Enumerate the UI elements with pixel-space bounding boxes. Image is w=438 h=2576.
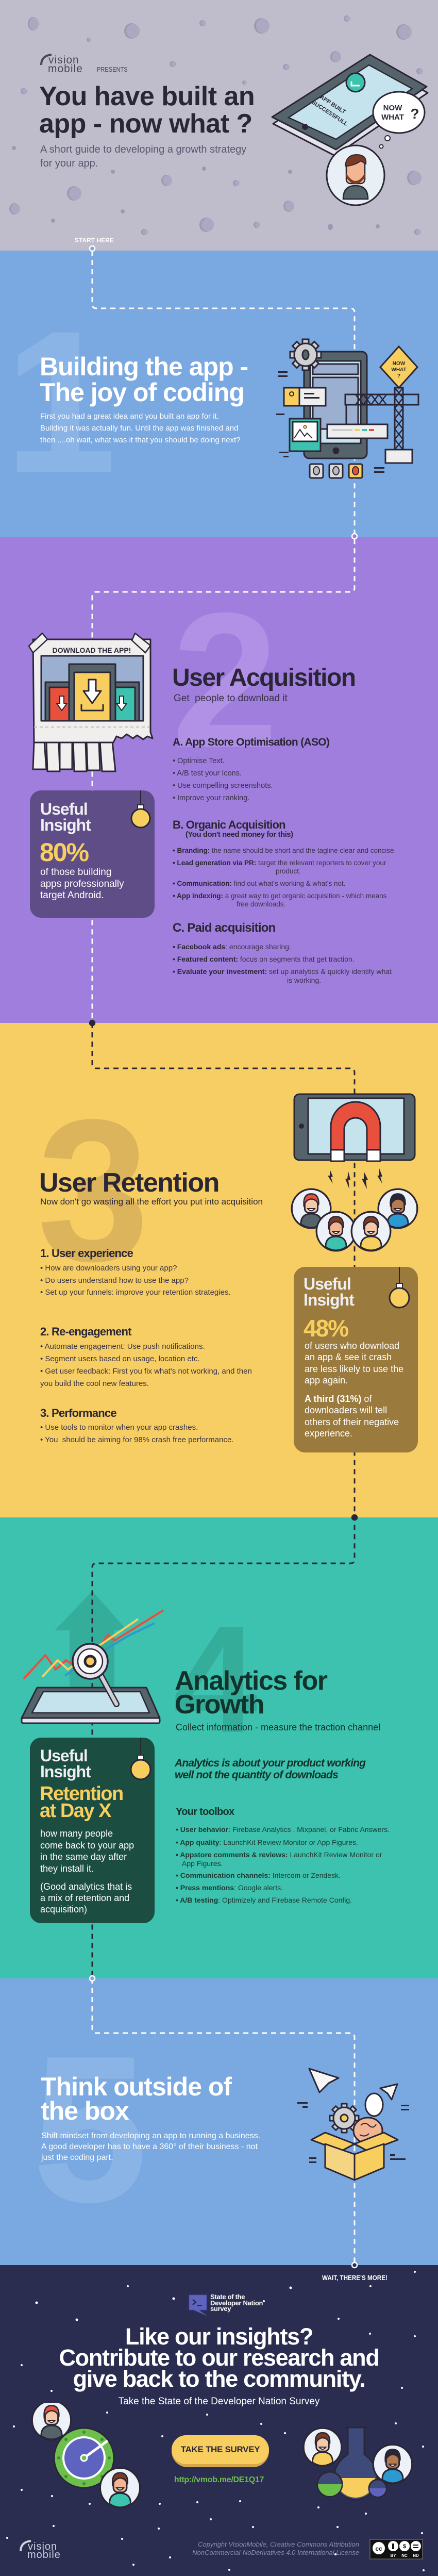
logo: state of the developer nation survey: Developer Nation	[210, 2299, 263, 2307]
icon: creative commons badge: ND	[413, 2553, 419, 2558]
ghost number 2: 2	[172, 573, 278, 788]
illustration: app construction	[276, 338, 419, 478]
callout: useful insight 48%: downloaders will tell	[305, 1405, 387, 1415]
subsection: performance: • You should be aiming for 98% crash free performance.	[40, 1435, 233, 1444]
subsection: paid acquisition: is working.	[287, 976, 321, 984]
subsection: paid acquisition: • Evaluate your investment: set up analytics & quickly identify what	[173, 967, 392, 976]
callout: retention at day x: in the same day after	[40, 1852, 127, 1862]
section 2: user acquisition	[0, 537, 438, 1023]
callout: retention at day x: come back to your app	[40, 1840, 134, 1850]
callout: retention at day x: Useful	[40, 1746, 88, 1765]
heading: think outside the box	[41, 2072, 232, 2125]
logo: state of the developer nation survey	[189, 2293, 263, 2316]
button: take the survey: TAKE THE SURVEY	[181, 2445, 260, 2454]
illustration: dial with avatars	[31, 2403, 141, 2509]
heading: analytics for growth: Analytics for	[175, 1666, 327, 1696]
callout: useful insight 80%: Insight	[40, 816, 91, 834]
list: your toolbox: • Press mentions: Google alerts.	[176, 1884, 283, 1892]
text: copyright	[192, 2540, 359, 2556]
subsection: organic acquisition: B. Organic Acquisition	[173, 818, 285, 831]
illustration: magnet pulling users	[291, 1093, 418, 1252]
callout: useful insight 80%	[30, 790, 155, 918]
icon: light bulb	[389, 1267, 410, 1309]
subsection: user experience	[40, 1247, 231, 1297]
title: You have built an	[39, 81, 255, 111]
callout: retention at day x: Insight	[40, 1762, 91, 1781]
callout: retention at day x: a mix of retention and	[40, 1893, 129, 1903]
ghost number 4: 4	[173, 1594, 258, 1764]
subsection: user experience: • Do users understand how to use the app?	[40, 1276, 189, 1285]
footer logo: vision mobile	[20, 2540, 61, 2561]
subsection: organic acquisition: • Branding: the name should be short and the tagline clear and concise.	[173, 847, 396, 854]
icon: creative commons badge: NC	[401, 2553, 408, 2558]
callout: retention at day x: (Good analytics that is	[40, 1881, 132, 1892]
subsection: user experience: 1. User experience	[40, 1247, 133, 1260]
text: building intro: Building it was actually fun. Until the app was finished and	[40, 424, 238, 433]
subsection: organic acquisition: • App indexing: a great way to get organic acquisition - which means	[173, 892, 386, 900]
subtitle: collect information: Collect information - measure the traction channel	[176, 1722, 380, 1732]
icon: light bulb	[131, 790, 150, 828]
list: your toolbox: • User behavior: Firebase Analytics , Mixpanel, or Fabric Answers.	[176, 1825, 390, 1834]
heading: user retention: User Retention	[39, 1168, 219, 1198]
subsection: re-engagement: • Automate engagement: Use push notifications.	[40, 1342, 205, 1351]
subsection: ASO: A. App Store Optimisation (ASO)	[173, 736, 329, 748]
subsection: ASO: • Optimise Text.	[173, 757, 225, 765]
illustration: download poster: DOWNLOAD THE APP!	[53, 646, 131, 654]
illustration: ideas box	[297, 2068, 409, 2181]
text: shift mindset: Shift mindset from developing an app to running a business.	[41, 2132, 260, 2140]
section: footer call to action	[0, 2265, 438, 2576]
subsection: organic acquisition	[173, 818, 396, 908]
illustration: flasks with avatars	[303, 2426, 413, 2501]
section: hero	[0, 0, 438, 251]
illustration: phone with now what bubble: APP BUILT	[318, 94, 347, 115]
logo: vision mobile presents: vision	[48, 54, 79, 66]
text: shift mindset: just the coding part.	[41, 2153, 113, 2162]
text: copyright: NonCommercial-NoDerivatives 4.0 International License	[192, 2549, 359, 2556]
heading: analytics for growth	[175, 1666, 328, 1720]
subsection: ASO	[173, 736, 329, 802]
callout: retention at day x: they install it.	[40, 1863, 94, 1874]
illustration: app construction: WHAT	[391, 367, 407, 373]
callout: useful insight 48%: an app & see it crash	[305, 1352, 392, 1362]
callout: retention at day x: acquisition)	[40, 1904, 87, 1914]
text: shift mindset: A good developer has to have a 360° of their business - not	[41, 2142, 258, 2151]
list: your toolbox: • Appstore comments & reviews: LaunchKit Review Monitor or	[176, 1851, 382, 1859]
quote: analytics is about product	[174, 1757, 366, 1781]
heading: like our insights: Like our insights?	[125, 2323, 313, 2350]
list: your toolbox	[176, 1806, 390, 1904]
callout: useful insight 48%: experience.	[305, 1428, 352, 1439]
subtitle: for your app.	[40, 158, 98, 169]
icon: creative commons badge: cc	[375, 2545, 382, 2552]
logo: state of the developer nation survey: survey	[210, 2305, 231, 2313]
callout: useful insight 48%: Useful	[304, 1275, 351, 1293]
subsection: paid acquisition: C. Paid acquisition	[173, 921, 275, 935]
subtitle	[40, 144, 246, 169]
icon: creative commons badge	[370, 2539, 423, 2560]
callout: useful insight 48%: Insight	[304, 1291, 354, 1309]
icon: light bulb	[130, 1738, 151, 1780]
callout: useful insight 80%: apps professionally	[40, 879, 124, 889]
text: shift mindset	[41, 2132, 260, 2162]
stars background	[6, 2271, 425, 2571]
ghost arrow	[55, 1592, 127, 1687]
ghost number 5: 5	[32, 2012, 148, 2245]
label: wait there's more: WAIT, THERE'S MORE!	[322, 2274, 388, 2282]
heading: building the app: Building the app -	[40, 352, 248, 381]
subsection: re-engagement	[40, 1325, 252, 1388]
label: start here: START HERE	[75, 237, 114, 244]
subtitle: A short guide to developing a growth strategy	[40, 144, 246, 155]
callout: useful insight 48%: are less likely to use the	[305, 1364, 403, 1374]
subsection: organic acquisition: (You don't need money for this)	[186, 830, 293, 839]
list: your toolbox: • App quality: LaunchKit Review Monitor or App Figures.	[176, 1838, 358, 1846]
logo: state of the developer nation survey: State of the	[210, 2293, 245, 2301]
section 5: think outside the box	[0, 1978, 438, 2265]
footer logo: vision mobile: vision	[28, 2541, 57, 2552]
ghost number 3: 3	[37, 1078, 149, 1303]
illustration: phone with now what bubble: ?	[410, 106, 419, 122]
subsection: paid acquisition	[173, 921, 392, 984]
heading: building the app: The joy of coding	[40, 378, 244, 407]
subsection: organic acquisition: free downloads.	[237, 900, 285, 908]
callout: useful insight 48%: others of their negative	[305, 1417, 399, 1427]
subsection: paid acquisition: • Facebook ads: encourage sharing.	[173, 943, 291, 951]
heading: building the app	[40, 352, 248, 407]
heading: like our insights: Contribute to our research and	[59, 2344, 379, 2371]
callout: useful insight 80%: of those building	[40, 867, 111, 878]
icon: creative commons badge: BY	[390, 2553, 396, 2558]
callout: retention at day x	[30, 1738, 155, 1923]
illustration: phone with now what bubble: SUCCESSFULL	[310, 99, 349, 127]
illustration: download poster	[28, 632, 154, 772]
subsection: user experience: • How are downloaders using your app?	[40, 1264, 177, 1273]
heading: think outside the box: Think outside of	[41, 2072, 231, 2101]
subsection: re-engagement: • Get user feedback: First you fix what's not working, and then	[40, 1367, 252, 1376]
subsection: ASO: • A/B test your Icons.	[173, 769, 242, 778]
heading: user acquisition: User Acquisition	[172, 664, 356, 691]
callout: useful insight 48%: A third (31%) of	[305, 1394, 372, 1404]
link: survey url: http://vmob.me/DE1Q17	[174, 2475, 264, 2484]
subtitle: take the survey: Take the State of the Developer Nation Survey	[119, 2396, 319, 2407]
callout: useful insight 48%: app again.	[305, 1375, 348, 1385]
callout: useful insight 48%	[294, 1267, 418, 1452]
title	[39, 81, 255, 139]
section 1: building the app	[0, 251, 438, 537]
footer logo: vision mobile: mobile	[27, 2549, 61, 2561]
logo: vision mobile presents	[40, 54, 128, 75]
ghost number 1: 1	[4, 289, 117, 515]
callout: retention at day x: how many people	[40, 1828, 113, 1839]
callout: useful insight 48%: 48%	[304, 1315, 348, 1342]
subsection: re-engagement: you build the cool new features.	[40, 1379, 149, 1388]
illustration: app construction: ?	[397, 373, 400, 379]
subsection: organic acquisition: product.	[276, 867, 301, 875]
subsection: re-engagement: 2. Re-engagement	[40, 1325, 131, 1338]
text: building intro: then ....oh wait, what was it that you should be doing next?	[40, 436, 241, 444]
subsection: performance	[40, 1407, 233, 1444]
icon: creative commons badge: $	[403, 2544, 406, 2550]
heading: analytics for growth: Growth	[175, 1690, 264, 1720]
list: your toolbox: App Figures.	[182, 1859, 223, 1868]
text: copyright: Copyright VisionMobile, Creative Commons Attribution	[198, 2540, 359, 2548]
list: your toolbox: Your toolbox	[176, 1806, 234, 1818]
subsection: user experience: • Set up your funnels: improve your retention strategies.	[40, 1288, 231, 1297]
subsection: ASO: • Improve your ranking.	[173, 794, 249, 802]
illustration: phone with now what bubble	[271, 54, 429, 206]
callout: retention at day x: at Day X	[40, 1800, 111, 1822]
callout: useful insight 80%: target Android.	[40, 890, 104, 901]
subsection: organic acquisition: • Lead generation via PR: target the relevant reporters to cover your	[173, 859, 386, 867]
button: take the survey	[172, 2435, 269, 2467]
subtitle: get people to download: Get people to download it	[174, 693, 288, 704]
section 4: analytics	[0, 1517, 438, 1978]
subsection: organic acquisition: • Communication: find out what's working & what's not.	[173, 880, 345, 887]
illustration: app construction: NOW	[393, 361, 406, 367]
list: your toolbox: • Communication channels: Intercom or Zendesk.	[176, 1871, 341, 1879]
text: building intro	[40, 412, 241, 444]
logo: vision mobile presents: mobile	[48, 63, 83, 75]
logo: vision mobile presents: PRESENTS	[97, 65, 128, 73]
subtitle: retention: Now don't go wasting all the effort you put into acquisition	[40, 1197, 263, 1207]
background bubbles	[9, 15, 423, 235]
quote: analytics is about product: well not the quantity of downloads	[175, 1769, 338, 1781]
heading: like our insights: give back to the community.	[73, 2366, 365, 2392]
heading: think outside the box: the box	[41, 2096, 129, 2125]
callout: retention at day x: Retention	[40, 1783, 123, 1805]
subsection: re-engagement: • Segment users based on usage, location etc.	[40, 1355, 200, 1363]
quote: analytics is about product: Analytics is about your product working	[175, 1757, 365, 1769]
subsection: paid acquisition: • Featured content: focus on segments that get traction.	[173, 955, 355, 963]
callout: useful insight 80%: 80%	[40, 838, 88, 867]
illustration: analytics magnifier	[21, 1609, 164, 1724]
callout: useful insight 48%: of users who download	[305, 1341, 399, 1351]
subsection: ASO: • Use compelling screenshots.	[173, 782, 273, 790]
illustration: phone with now what bubble: WHAT	[381, 113, 404, 122]
heading: like our insights	[59, 2323, 379, 2392]
callout: useful insight 80%: Useful	[40, 800, 88, 818]
text: building intro: First you had a great idea and you built an app for it.	[40, 412, 219, 421]
title: app - now what ?	[39, 109, 252, 139]
illustration: phone with now what bubble: NOW	[383, 104, 402, 112]
section 3: user retention	[0, 1023, 438, 1517]
list: your toolbox: • A/B testing: Optimizely and Firebase Remote Config.	[176, 1896, 352, 1904]
subsection: performance: • Use tools to monitor when your app crashes.	[40, 1423, 198, 1432]
subsection: performance: 3. Performance	[40, 1407, 116, 1419]
